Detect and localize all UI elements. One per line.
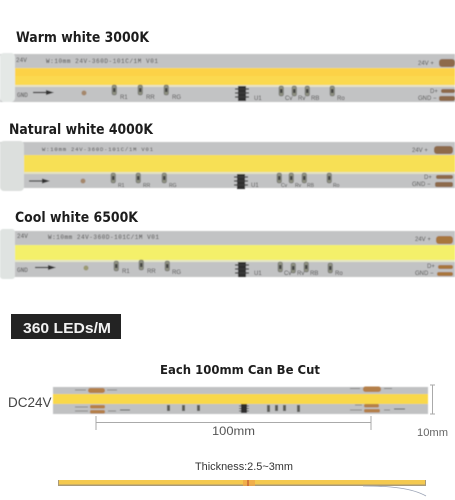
dimension: 10mm (417, 385, 448, 439)
LED strip: natural white (0, 141, 455, 191)
LED strip: cool white: 24V (17, 233, 28, 240)
LED strip: cool white: RR (147, 269, 156, 275)
LED strip: warm white: Ro (337, 96, 345, 102)
LED strip: cool white: GND − (415, 271, 434, 277)
LED strip: natural white: R1 (118, 183, 125, 189)
LED strip: warm white: GND − (418, 96, 437, 102)
LED strip: warm white: GND (17, 92, 28, 99)
diagram: strip side view (58, 480, 426, 496)
LED strip: cool white: Ro (335, 271, 343, 277)
LED strip: cool white: R1 (122, 269, 130, 275)
LED strip: warm white: R1 (120, 95, 128, 101)
LED strip: warm white: RB (311, 96, 319, 102)
heading: cool white: Cool white 6500K (15, 210, 139, 226)
dimension: 100mm: 100mm (212, 424, 255, 438)
dimension: 10mm: 10mm (417, 427, 448, 439)
LED strip: warm white: Cv (285, 96, 292, 102)
LED strip: natural white: GND − (412, 182, 431, 188)
label: DC24V: DC24V (8, 395, 52, 410)
LED strip: natural white: RG (169, 183, 177, 189)
badge: 360 LEDs/M: 360 LEDs/M (23, 320, 111, 337)
heading: each 100mm can be cut: Each 100mm Can Be Cut (160, 362, 320, 377)
LED strip: warm white: 24V + (418, 61, 434, 67)
LED strip: warm white: RR (146, 95, 155, 101)
LED strip: warm white: 24V (16, 57, 27, 64)
label: thickness: Thickness:2.5~3mm (195, 461, 293, 473)
badge: 360 LEDs/M (11, 314, 121, 339)
LED strip: cool white: GND (17, 267, 28, 274)
LED strip: warm white (0, 53, 455, 102)
LED strip: natural white: RR (143, 183, 151, 189)
LED strip: cool white: RG (172, 270, 181, 276)
LED strip: natural white: RB (307, 183, 315, 189)
LED strip: natural white: 24V + (412, 148, 428, 154)
LED strip: cool white: Cv (284, 271, 291, 277)
LED strip: natural white: Rv (295, 183, 302, 189)
LED strip: warm white: U1 (254, 96, 262, 102)
LED strip: cool white: W:10mm 24V-360D-101C/1M V01 (48, 234, 159, 241)
LED strip: natural white: Ro (333, 183, 340, 189)
LED strip: warm white: D+ (430, 89, 438, 95)
LED strip: warm white: Rv (298, 96, 305, 102)
LED strip: cool white (0, 229, 455, 279)
LED strip: cool white: 24V + (415, 237, 431, 243)
LED strip: warm white: RG (172, 95, 181, 101)
LED strip: natural white: D+ (424, 175, 432, 181)
heading: natural white: Natural white 4000K (9, 122, 154, 138)
LED strip: natural white: U1 (251, 183, 259, 189)
heading: warm white: Warm white 3000K (16, 30, 150, 46)
LED strip: natural white: W:10mm 24V-360D-101C/1M V01 (42, 146, 154, 153)
LED strip: cool white: Rv (297, 271, 304, 277)
LED strip: cool white: RB (310, 271, 318, 277)
dimension: 100mm (96, 416, 371, 438)
LED strip: cool white: U1 (254, 271, 262, 277)
diagram: cuttable strip (53, 386, 428, 414)
LED strip: natural white: Cv (281, 183, 288, 189)
LED strip: cool white: D+ (427, 264, 435, 270)
LED strip: warm white: W:10mm 24V-360D-101C/1M V01 (46, 58, 158, 65)
